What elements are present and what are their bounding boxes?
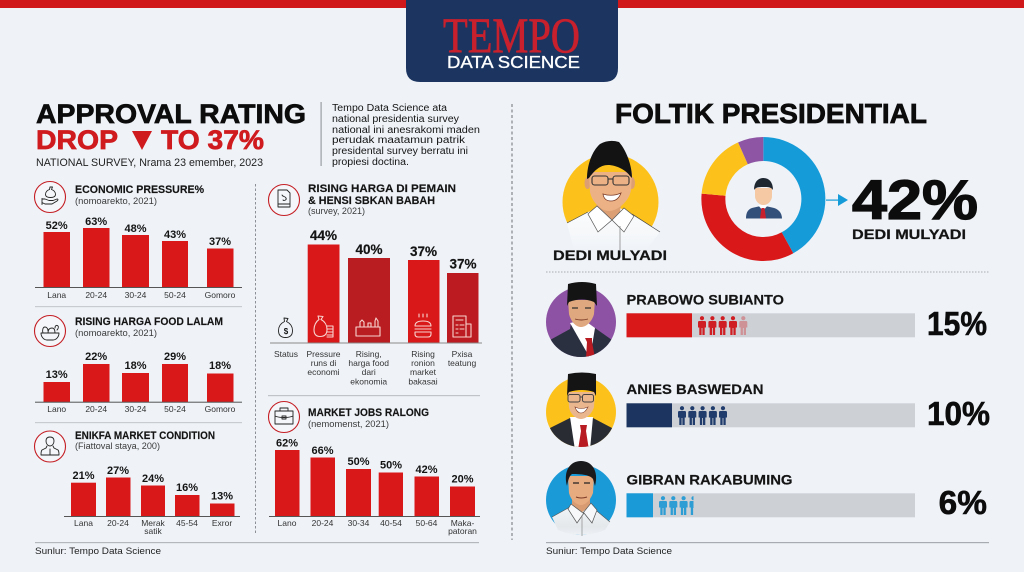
- bar chart: economic pressure: [35, 216, 242, 300]
- bar chart: market condition: 45-54: [176, 518, 198, 528]
- bar chart: rising food: 18%: [209, 360, 231, 372]
- panel: market jobs: [268, 402, 480, 536]
- row: Gibran Rakabuming: [546, 461, 987, 536]
- bar chart: rising food: 18%: [124, 360, 147, 372]
- bar: Gibran: [626, 493, 915, 517]
- bar chart: market condition: [64, 465, 240, 536]
- source right: Suniur: Tempo Data Science: [546, 546, 672, 557]
- bar chart: market jobs: 20%: [451, 474, 474, 486]
- bar chart: market condition: 20-24: [107, 518, 129, 528]
- bar chart: economic pressure: 63%: [85, 216, 107, 228]
- row: Anies Baswedan: 10%: [927, 395, 990, 432]
- bar chart: economic pressure: 50-24: [164, 290, 186, 300]
- bar chart: rising prices: dari: [362, 367, 376, 377]
- panel: economic pressure: ECONOMIC PRESSURE%: [75, 184, 204, 196]
- bar chart: rising food: 13%: [46, 369, 68, 381]
- bar chart: market jobs: 50-64: [416, 518, 438, 528]
- portrait: Dedi Mulyadi: [562, 141, 660, 250]
- bar chart: market condition: 27%: [107, 465, 129, 477]
- bar chart: rising prices: 37%: [449, 256, 477, 272]
- main heading: DROP: [36, 125, 118, 155]
- panel: economic pressure: (nomoarekto, 2021): [75, 196, 157, 206]
- intro paragraph: Tempo Data Science ata: [332, 103, 447, 114]
- bar chart: economic pressure: 30-24: [125, 290, 147, 300]
- bar chart: market condition: 21%: [72, 470, 95, 482]
- icon: food bowl: [34, 316, 66, 346]
- bar: Prabowo: [626, 313, 915, 337]
- bar chart: market condition: Lana: [74, 518, 93, 528]
- panel: rising food: (nomoarekto, 2021): [75, 328, 157, 338]
- bar chart: rising food: 22%: [85, 351, 107, 363]
- panel: rising food: [34, 316, 242, 414]
- bar chart: market jobs: [269, 438, 480, 536]
- main heading: [36, 99, 306, 169]
- logo tab: [406, 0, 618, 82]
- bar chart: rising prices: Rising,: [356, 349, 382, 359]
- intro paragraph: presidental survey berratu ini: [332, 146, 468, 157]
- right heading: FOLTIK PRESIDENTIAL: [615, 98, 927, 129]
- main heading: NATIONAL SURVEY, Nrama 23 emember, 2023: [36, 157, 263, 169]
- top red band: [0, 0, 1024, 8]
- icon: white bill: [453, 316, 471, 337]
- bar chart: rising prices: teatung: [448, 358, 476, 368]
- bar chart: rising prices: bakasai: [408, 376, 438, 386]
- bar chart: market jobs: 50%: [347, 456, 370, 468]
- bar chart: rising prices: ekonomia: [350, 376, 387, 386]
- panel: rising food: RISING HARGA FOOD LALAM: [75, 316, 223, 328]
- bar chart: rising prices: harga food: [348, 358, 389, 368]
- bar chart: economic pressure: 20-24: [85, 290, 107, 300]
- bar chart: rising food: Gomoro: [205, 404, 236, 414]
- icon: money hand: [34, 182, 66, 212]
- bar chart: market condition: 16%: [176, 482, 198, 494]
- donut chart: [701, 137, 825, 261]
- stat: 42%: DEDI MULYADI: [852, 227, 966, 242]
- source left: Sunlur: Tempo Data Science: [35, 546, 161, 557]
- row: Prabowo Subianto: [546, 282, 987, 360]
- bar chart: economic pressure: 37%: [209, 236, 231, 248]
- bar chart: market condition: satik: [144, 526, 162, 536]
- bar chart: market jobs: Maka-: [451, 518, 474, 528]
- icon: white money bag: [314, 316, 333, 337]
- icon: person: [34, 431, 66, 462]
- portrait: Anies: [546, 372, 616, 450]
- bar chart: market jobs: Lano: [278, 518, 297, 528]
- panel: economic pressure: [34, 182, 242, 300]
- row: Prabowo Subianto: 15%: [927, 305, 987, 342]
- bar chart: rising prices: runs di: [311, 358, 336, 368]
- stat: 42%: 42%: [852, 168, 978, 231]
- logo tab: TEMPO: [443, 7, 580, 63]
- bar chart: economic pressure: 48%: [124, 223, 147, 235]
- bar chart: market jobs: 20-24: [312, 518, 334, 528]
- bar chart: rising food: 20-24: [85, 404, 107, 414]
- bar chart: rising food: Lano: [47, 404, 66, 414]
- icon: white burger: [415, 314, 431, 337]
- bar chart: market jobs: 50%: [380, 460, 402, 472]
- bar chart: economic pressure: Gomoro: [205, 290, 236, 300]
- bar chart: economic pressure: 43%: [164, 229, 186, 241]
- bar chart: rising prices: Pressure: [306, 349, 341, 359]
- main heading: APPROVAL RATING: [36, 99, 306, 129]
- icon: document: [268, 184, 300, 216]
- bar chart: market jobs: 66%: [311, 445, 334, 457]
- bar chart: rising prices: [270, 228, 482, 386]
- bar chart: rising food: 50-24: [164, 404, 186, 414]
- bar chart: rising prices: market: [410, 367, 437, 377]
- bar chart: rising prices: 40%: [355, 242, 383, 257]
- bar chart: rising food: 29%: [164, 351, 186, 363]
- intro paragraph: [320, 102, 480, 168]
- bar chart: economic pressure: Lana: [47, 290, 66, 300]
- row: Anies Baswedan: [546, 372, 990, 450]
- label: Dedi Mulyadi: DEDI MULYADI: [553, 248, 667, 263]
- bar chart: market jobs: 42%: [415, 464, 438, 476]
- panel: rising prices: RISING HARGA DI PEMAIN: [308, 183, 456, 195]
- bar chart: market jobs: 62%: [276, 438, 298, 450]
- icon: money bag: [278, 318, 292, 338]
- bar chart: market jobs: 40-54: [380, 518, 402, 528]
- intro paragraph: national presidentia survey: [332, 114, 459, 125]
- bar chart: rising prices: ronion: [411, 358, 435, 368]
- row: Gibran Rakabuming: GIBRAN RAKABUMING: [626, 471, 793, 487]
- panel: market condition: (Fiattoval staya, 200): [75, 441, 160, 451]
- bar chart: market condition: Exror: [212, 518, 232, 528]
- bar chart: market jobs: 30-34: [348, 518, 370, 528]
- bar chart: market jobs: patoran: [448, 526, 477, 536]
- row: Anies Baswedan: ANIES BASWEDAN: [626, 381, 764, 397]
- panel: market condition: [34, 430, 240, 536]
- icon: briefcase: [268, 402, 300, 432]
- bar chart: rising food: [35, 351, 242, 414]
- bar chart: rising prices: 37%: [410, 244, 437, 259]
- panel: rising prices: & HENSI SBKAN BABAH: [308, 195, 435, 207]
- bar chart: rising prices: Rising: [411, 349, 435, 359]
- bar chart: economic pressure: 52%: [46, 220, 68, 232]
- arrow to 42%: [826, 194, 848, 206]
- bar chart: market condition: Merak: [141, 518, 166, 528]
- panel: market condition: ENIKFA MARKET CONDITION: [75, 430, 215, 442]
- panel: market jobs: MARKET JOBS RALONG: [308, 407, 429, 419]
- logo tab: DATA SCIENCE: [447, 52, 580, 72]
- icon: money bag: $: [284, 327, 289, 336]
- intro paragraph: propiesi doctina.: [332, 157, 409, 168]
- bar chart: rising prices: Pxisa: [452, 349, 473, 359]
- icon: white market stall: [356, 318, 380, 336]
- panel: rising prices: (survey, 2021): [308, 206, 365, 216]
- intro paragraph: perudak maatamun patrik: [332, 135, 466, 146]
- row: Gibran Rakabuming: 6%: [939, 484, 987, 521]
- row: Prabowo Subianto: PRABOWO SUBIANTO: [626, 291, 784, 307]
- bar chart: market condition: 13%: [211, 490, 233, 502]
- portrait: Prabowo: [546, 282, 616, 360]
- portrait: Gibran: [546, 461, 616, 536]
- bar chart: rising prices: economi: [307, 367, 340, 377]
- intro paragraph: national ini anesrakomi maden: [332, 125, 480, 136]
- bar chart: rising prices: 44%: [310, 228, 337, 243]
- icon: center person: [746, 178, 782, 218]
- bar chart: rising food: 30-24: [125, 404, 147, 414]
- panel: rising prices: [268, 183, 482, 386]
- main heading: TO 37%: [161, 125, 264, 155]
- panel: market jobs: (nemomenst, 2021): [308, 419, 389, 429]
- bar chart: rising prices: Status: [274, 349, 298, 359]
- bar chart: market condition: 24%: [142, 473, 164, 485]
- bar: Anies: [626, 403, 915, 427]
